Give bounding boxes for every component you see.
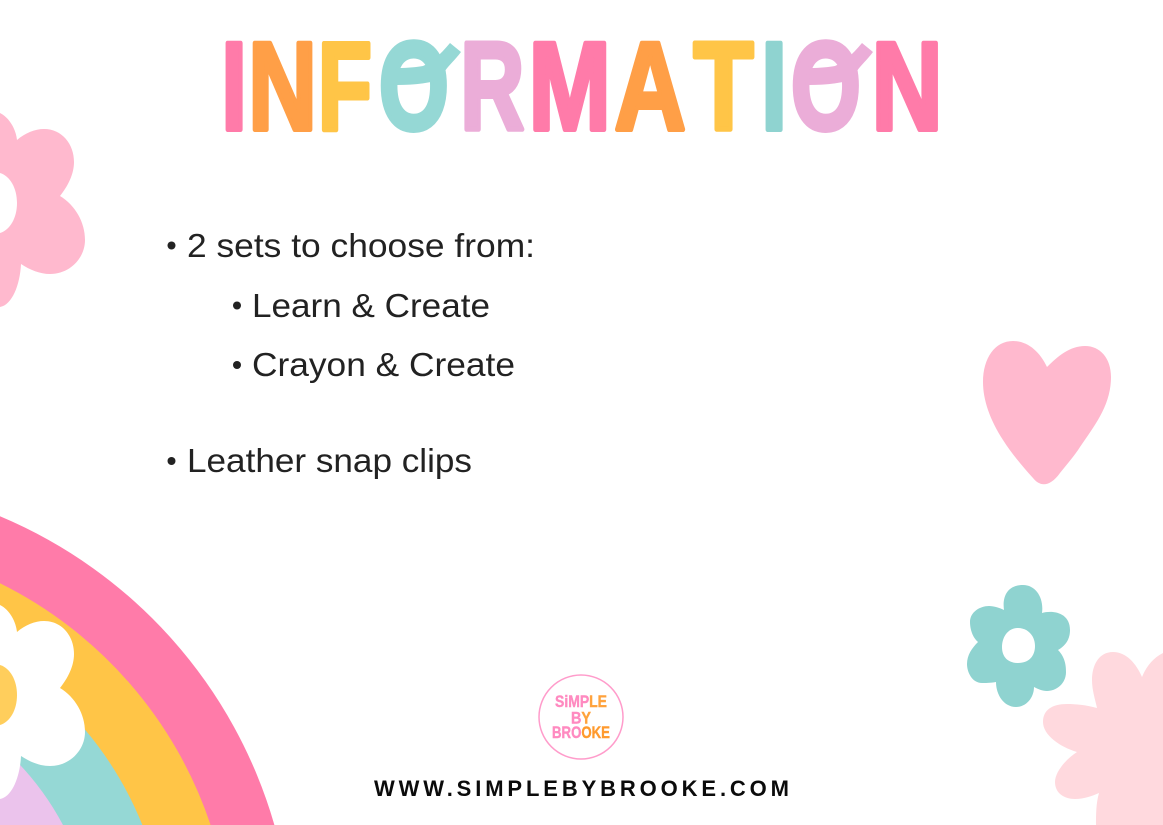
bullet: Learn and Create: Learn & Create — [252, 287, 490, 324]
letter N: N — [872, 16, 943, 156]
bullet: Crayon and Create: Crayon & Create — [252, 346, 515, 383]
letter I: I — [761, 17, 787, 157]
logo text: BY — [571, 710, 591, 728]
title — [221, 16, 943, 157]
white flower on rainbow — [0, 605, 85, 799]
website url: WWW.SIMPLEBYBROOKE.COM — [374, 776, 789, 801]
logo text: SiMPLE — [555, 693, 607, 711]
logo text — [552, 693, 610, 742]
letter I: I — [221, 17, 247, 157]
pink flower, top left — [0, 113, 85, 307]
letter F: F — [318, 16, 372, 156]
yellow flower centre — [0, 665, 17, 725]
bullet list — [168, 227, 535, 479]
logo badge — [539, 675, 623, 759]
bullet: Leather snap clips: Leather snap clips — [187, 442, 472, 479]
logo text: BROOKE — [552, 724, 610, 742]
letter O with crossbar: O — [379, 17, 449, 157]
rainbow — [0, 516, 274, 825]
heart — [983, 341, 1111, 484]
letter N: N — [248, 17, 317, 157]
light pink flower, bottom right — [1043, 652, 1163, 825]
bullet: 2 sets: 2 sets to choose from: — [187, 227, 535, 264]
letter O with crossbar: O — [791, 17, 861, 157]
letter A: A — [614, 16, 686, 156]
letter T: T — [694, 16, 754, 156]
teal flower — [967, 585, 1070, 707]
letter R: R — [460, 16, 524, 156]
letter M: M — [529, 16, 611, 156]
